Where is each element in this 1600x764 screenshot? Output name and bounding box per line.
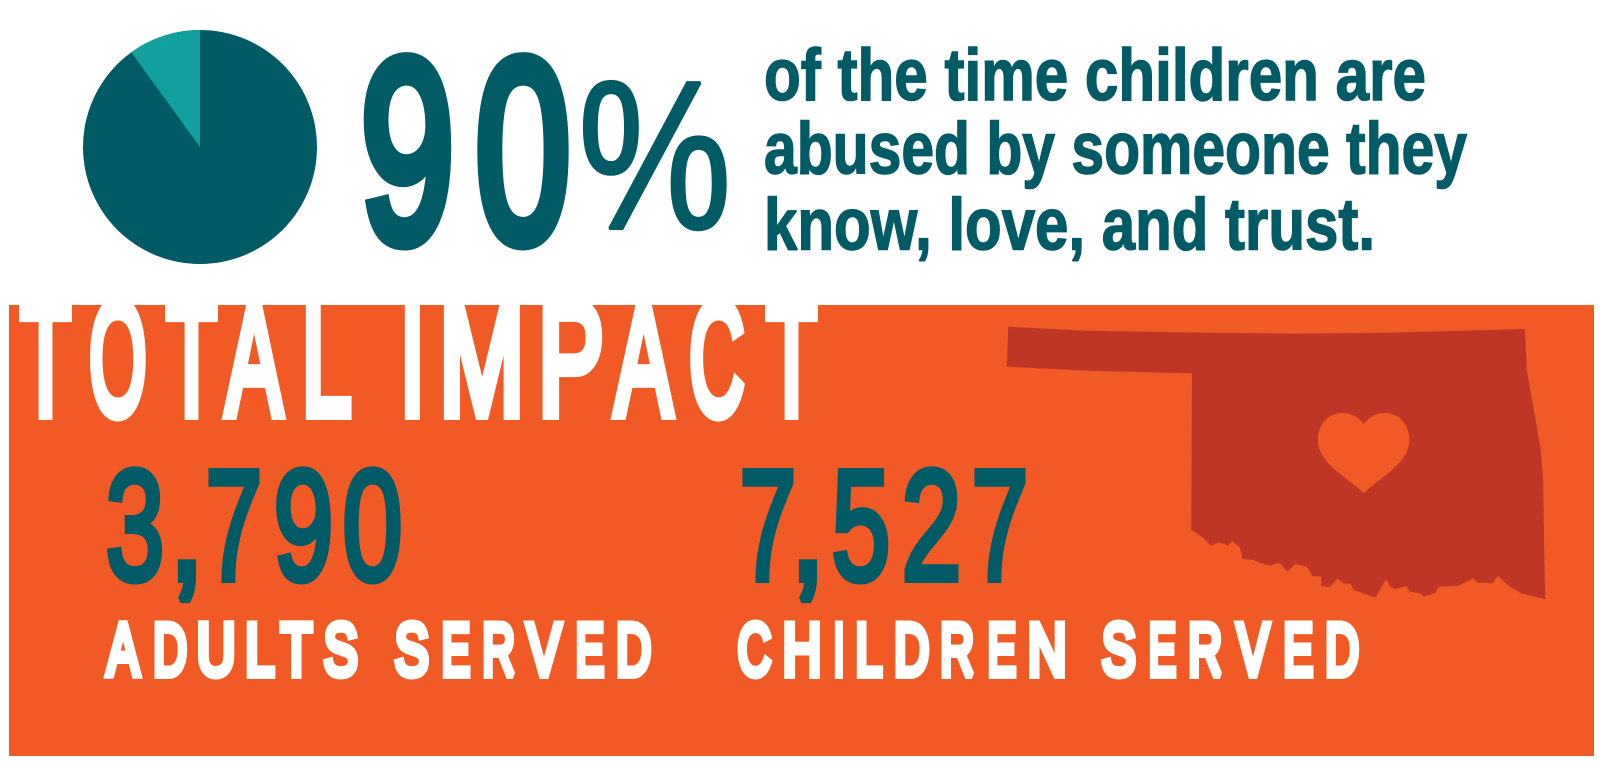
panel: total impact bbox=[9, 269, 1594, 756]
stat: adults served: 0 bbox=[342, 438, 402, 614]
big stat: 90%: 0 bbox=[476, 6, 570, 296]
stat: adults served: 3 bbox=[106, 438, 164, 614]
stat: children served: D bbox=[1325, 610, 1359, 691]
stat: adults served: V bbox=[527, 610, 561, 691]
stat: children served: N bbox=[1028, 610, 1066, 691]
stat: adults served: U bbox=[197, 610, 235, 691]
stat: adults served: , bbox=[169, 438, 205, 614]
heading: total impact: T bbox=[166, 269, 217, 448]
big stat: 90%: 9 bbox=[361, 6, 454, 296]
stat: adults served: A bbox=[107, 610, 139, 691]
heading: total impact: T bbox=[766, 269, 817, 448]
stat: adults served: S bbox=[324, 610, 358, 691]
stat: children served: D bbox=[894, 610, 929, 691]
heading: total impact: M bbox=[439, 269, 524, 448]
stat: adults served: 7 bbox=[206, 438, 262, 614]
heading: total impact: I bbox=[400, 269, 425, 448]
heading: total impact: A bbox=[226, 269, 282, 448]
stat: adults served: L bbox=[245, 610, 274, 691]
stat: children served: R bbox=[940, 610, 974, 691]
stat: children served: I bbox=[833, 610, 844, 691]
stat: children served: , bbox=[790, 438, 826, 614]
stat: adults served: T bbox=[281, 610, 312, 691]
stat: children served: 7 bbox=[972, 438, 1028, 614]
stat: adults served: E bbox=[576, 610, 604, 691]
stat: children served: E bbox=[1149, 610, 1176, 691]
heading: total impact: A bbox=[615, 269, 672, 448]
statement text bbox=[764, 35, 1467, 266]
statement text: of the time children are bbox=[764, 35, 1426, 116]
heading: total impact: L bbox=[302, 269, 348, 448]
stat: children served: H bbox=[783, 610, 821, 691]
heading: total impact: T bbox=[20, 269, 71, 448]
stat: children served: V bbox=[1237, 610, 1269, 691]
stat: adults served: R bbox=[482, 610, 515, 691]
icon: Oklahoma map with heart bbox=[1007, 327, 1545, 599]
stat: children served: L bbox=[856, 610, 882, 691]
stat: children served: E bbox=[1283, 610, 1313, 691]
stat: children served: S bbox=[1102, 610, 1136, 691]
big stat: 90%: % bbox=[578, 36, 732, 274]
stat: adults served: 9 bbox=[274, 438, 334, 614]
pie chart: 90 percent bbox=[83, 30, 317, 264]
statement text: know, love, and trust. bbox=[764, 184, 1375, 266]
stat: adults served: D bbox=[616, 610, 651, 691]
stat: children served: C bbox=[738, 610, 771, 691]
stat: adults served bbox=[106, 438, 651, 691]
heading: total impact: P bbox=[538, 269, 604, 448]
stat: children served bbox=[738, 438, 1359, 691]
stat: children served: R bbox=[1188, 610, 1222, 691]
heading: total impact: O bbox=[89, 269, 146, 448]
stat: children served: 5 bbox=[832, 438, 890, 614]
heading: total impact: C bbox=[689, 269, 744, 448]
stat: adults served: D bbox=[153, 610, 187, 691]
stat: children served: 7 bbox=[740, 438, 796, 614]
stat: adults served: S bbox=[395, 610, 429, 691]
stat: children served: E bbox=[988, 610, 1016, 691]
stat: adults served: E bbox=[442, 610, 470, 691]
stat: children served: 2 bbox=[902, 438, 962, 614]
